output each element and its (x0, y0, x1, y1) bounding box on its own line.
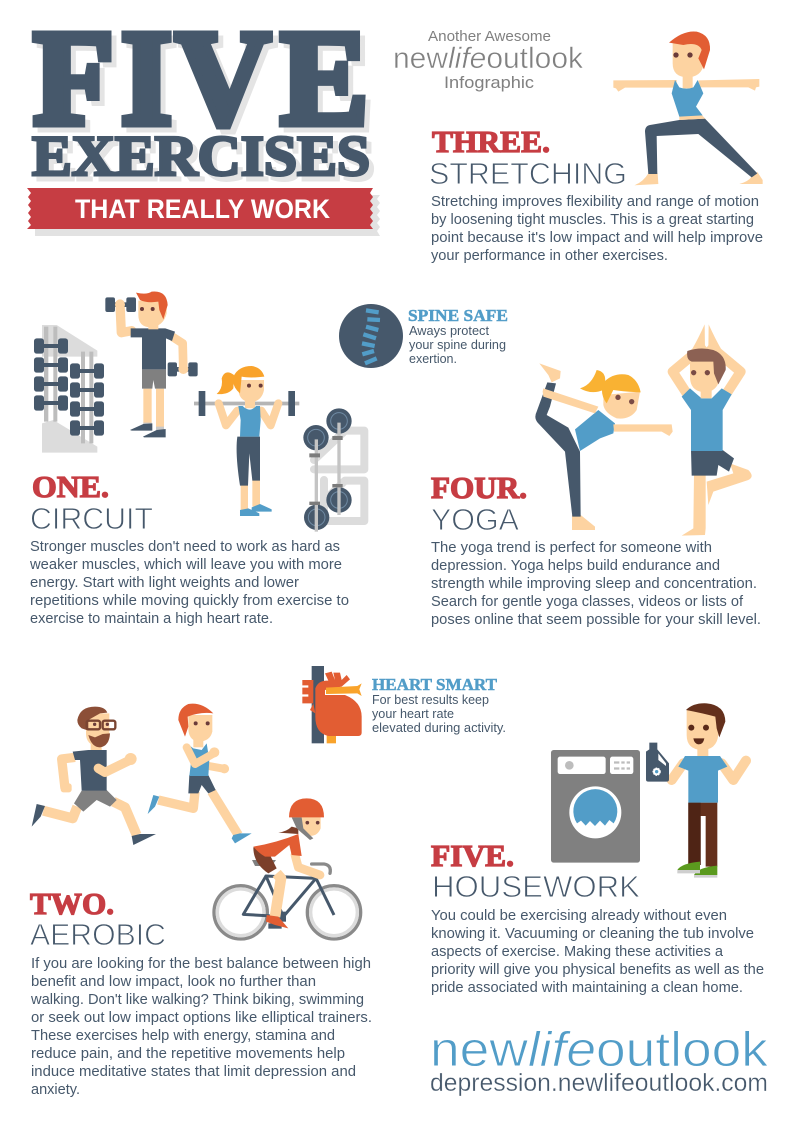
section: four yoga: strength while improving sleep and concentration. (431, 575, 757, 592)
section: one circuit: Stronger muscles don't need to work as hard as (30, 538, 340, 555)
callout: spine safe: Aways protect (409, 323, 489, 338)
footer: newlifeoutlook logo and url: depression.newlifeoutlook.com (430, 1069, 768, 1097)
section: four yoga: Search for gentle yoga classes, videos or lists of (431, 593, 744, 610)
section: two aerobic: benefit and low impact, look no further than (31, 973, 316, 990)
brand line: another awesome newlifeoutlook infographic: Another Awesome (428, 28, 551, 45)
section: three stretching: STRETCHING (429, 156, 627, 191)
section: one circuit: energy. Start with light weights and lower (30, 574, 299, 591)
section: three stretching: Stretching improves flexibility and range of motion (431, 193, 759, 210)
illustration: woman runner (148, 704, 252, 843)
section: four yoga: The yoga trend is perfect for someone with (431, 539, 712, 556)
section: three stretching: THREE. (432, 124, 550, 159)
illustration: yoga man (673, 324, 752, 536)
section: four yoga: FOUR. (431, 470, 527, 505)
illustration: man lifting dumbbells (105, 291, 198, 437)
section: three stretching: your performance in other exercises. (431, 247, 668, 264)
section: five housework: pride associated with maintaining a clean home. (431, 979, 743, 996)
section: three stretching: point because it's low impact and will help improve (431, 229, 763, 246)
section: two aerobic: These exercises help with energy, stamina and (31, 1027, 335, 1044)
brand line: another awesome newlifeoutlook infographic: Infographic (444, 73, 535, 92)
section: five housework: knowing it. Vacuuming or cleaning the tub involve (431, 925, 754, 942)
callout: heart smart: elevated during activity. (372, 720, 506, 735)
illustration: woman with barbell (194, 366, 299, 516)
section: four yoga: poses online that seem possible for your skill level. (431, 611, 761, 628)
section: one circuit: ONE. (32, 469, 109, 504)
callout: spine safe: your spine during (409, 337, 506, 352)
section: five housework: You could be exercising already without even (431, 907, 727, 924)
banner: that really work (27, 188, 380, 236)
section: two aerobic (30, 886, 372, 1098)
callout: heart smart (372, 675, 506, 735)
illustration: man with detergent (646, 703, 746, 878)
callout: spine safe: exertion. (409, 351, 457, 366)
illustration: washing machine (551, 750, 640, 863)
section: four yoga: depression. Yoga helps build endurance and (431, 557, 720, 574)
section: one circuit: repetitions while moving quickly from exercise to (30, 592, 349, 609)
section: one circuit (29, 469, 349, 627)
section: three stretching: by loosening tight muscles. This is a great starting (431, 211, 754, 228)
section: four yoga (431, 470, 761, 628)
section: five housework: aspects of exercise. Making these activities a (431, 943, 724, 960)
illustration: yoga woman (535, 363, 673, 530)
callout: heart smart: your heart rate (372, 706, 454, 721)
illustration: dumbbell rack (34, 325, 104, 453)
illustration: cyclist (214, 798, 361, 939)
section: five housework: priority will give you physical benefits as well as the (431, 961, 764, 978)
section: one circuit: weaker muscles, which will leave you with more (29, 556, 342, 573)
section: one circuit: CIRCUIT (30, 501, 153, 536)
illustration: stretching woman (613, 31, 763, 185)
section: two aerobic: walking. Don't like walking? Think biking, swimming (30, 991, 364, 1008)
section: two aerobic: induce meditative states that limit depression and (31, 1063, 356, 1080)
section: three stretching (429, 124, 763, 264)
section: two aerobic: AEROBIC (30, 917, 166, 952)
section: two aerobic: TWO. (30, 886, 114, 921)
icon: heart (302, 666, 362, 743)
section: one circuit: exercise to maintain a high heart rate. (30, 610, 273, 627)
brand line: another awesome newlifeoutlook infographic: newlifeoutlook (393, 42, 584, 75)
illustration: weight plates rack (303, 408, 364, 532)
icon: spine (339, 304, 403, 368)
section: five housework (431, 838, 764, 996)
section: two aerobic: If you are looking for the best balance between high (31, 955, 371, 972)
section: two aerobic: reduce pain, and the repetitive movements help (31, 1045, 345, 1062)
illustration: bearded runner (32, 707, 156, 845)
section: four yoga: YOGA (431, 502, 519, 537)
section: five housework: FIVE. (431, 838, 514, 873)
banner: that really work: THAT REALLY WORK (75, 194, 330, 224)
section: two aerobic: anxiety. (31, 1081, 80, 1098)
title: EXERCISES (32, 125, 370, 188)
footer: newlifeoutlook logo and url: newlifeoutlook (430, 1023, 769, 1077)
callout: heart smart: For best results keep (372, 692, 489, 707)
callout: spine safe (408, 306, 508, 366)
title: FIVE (33, 3, 368, 153)
section: two aerobic: or seek out low impact options like elliptical trainers. (31, 1009, 372, 1026)
footer: newlifeoutlook logo and url (430, 1023, 769, 1097)
section: five housework: HOUSEWORK (432, 869, 640, 904)
callout: spine safe: SPINE SAFE (408, 306, 508, 325)
brand line: another awesome newlifeoutlook infographic (393, 28, 584, 92)
callout: heart smart: HEART SMART (372, 675, 498, 694)
